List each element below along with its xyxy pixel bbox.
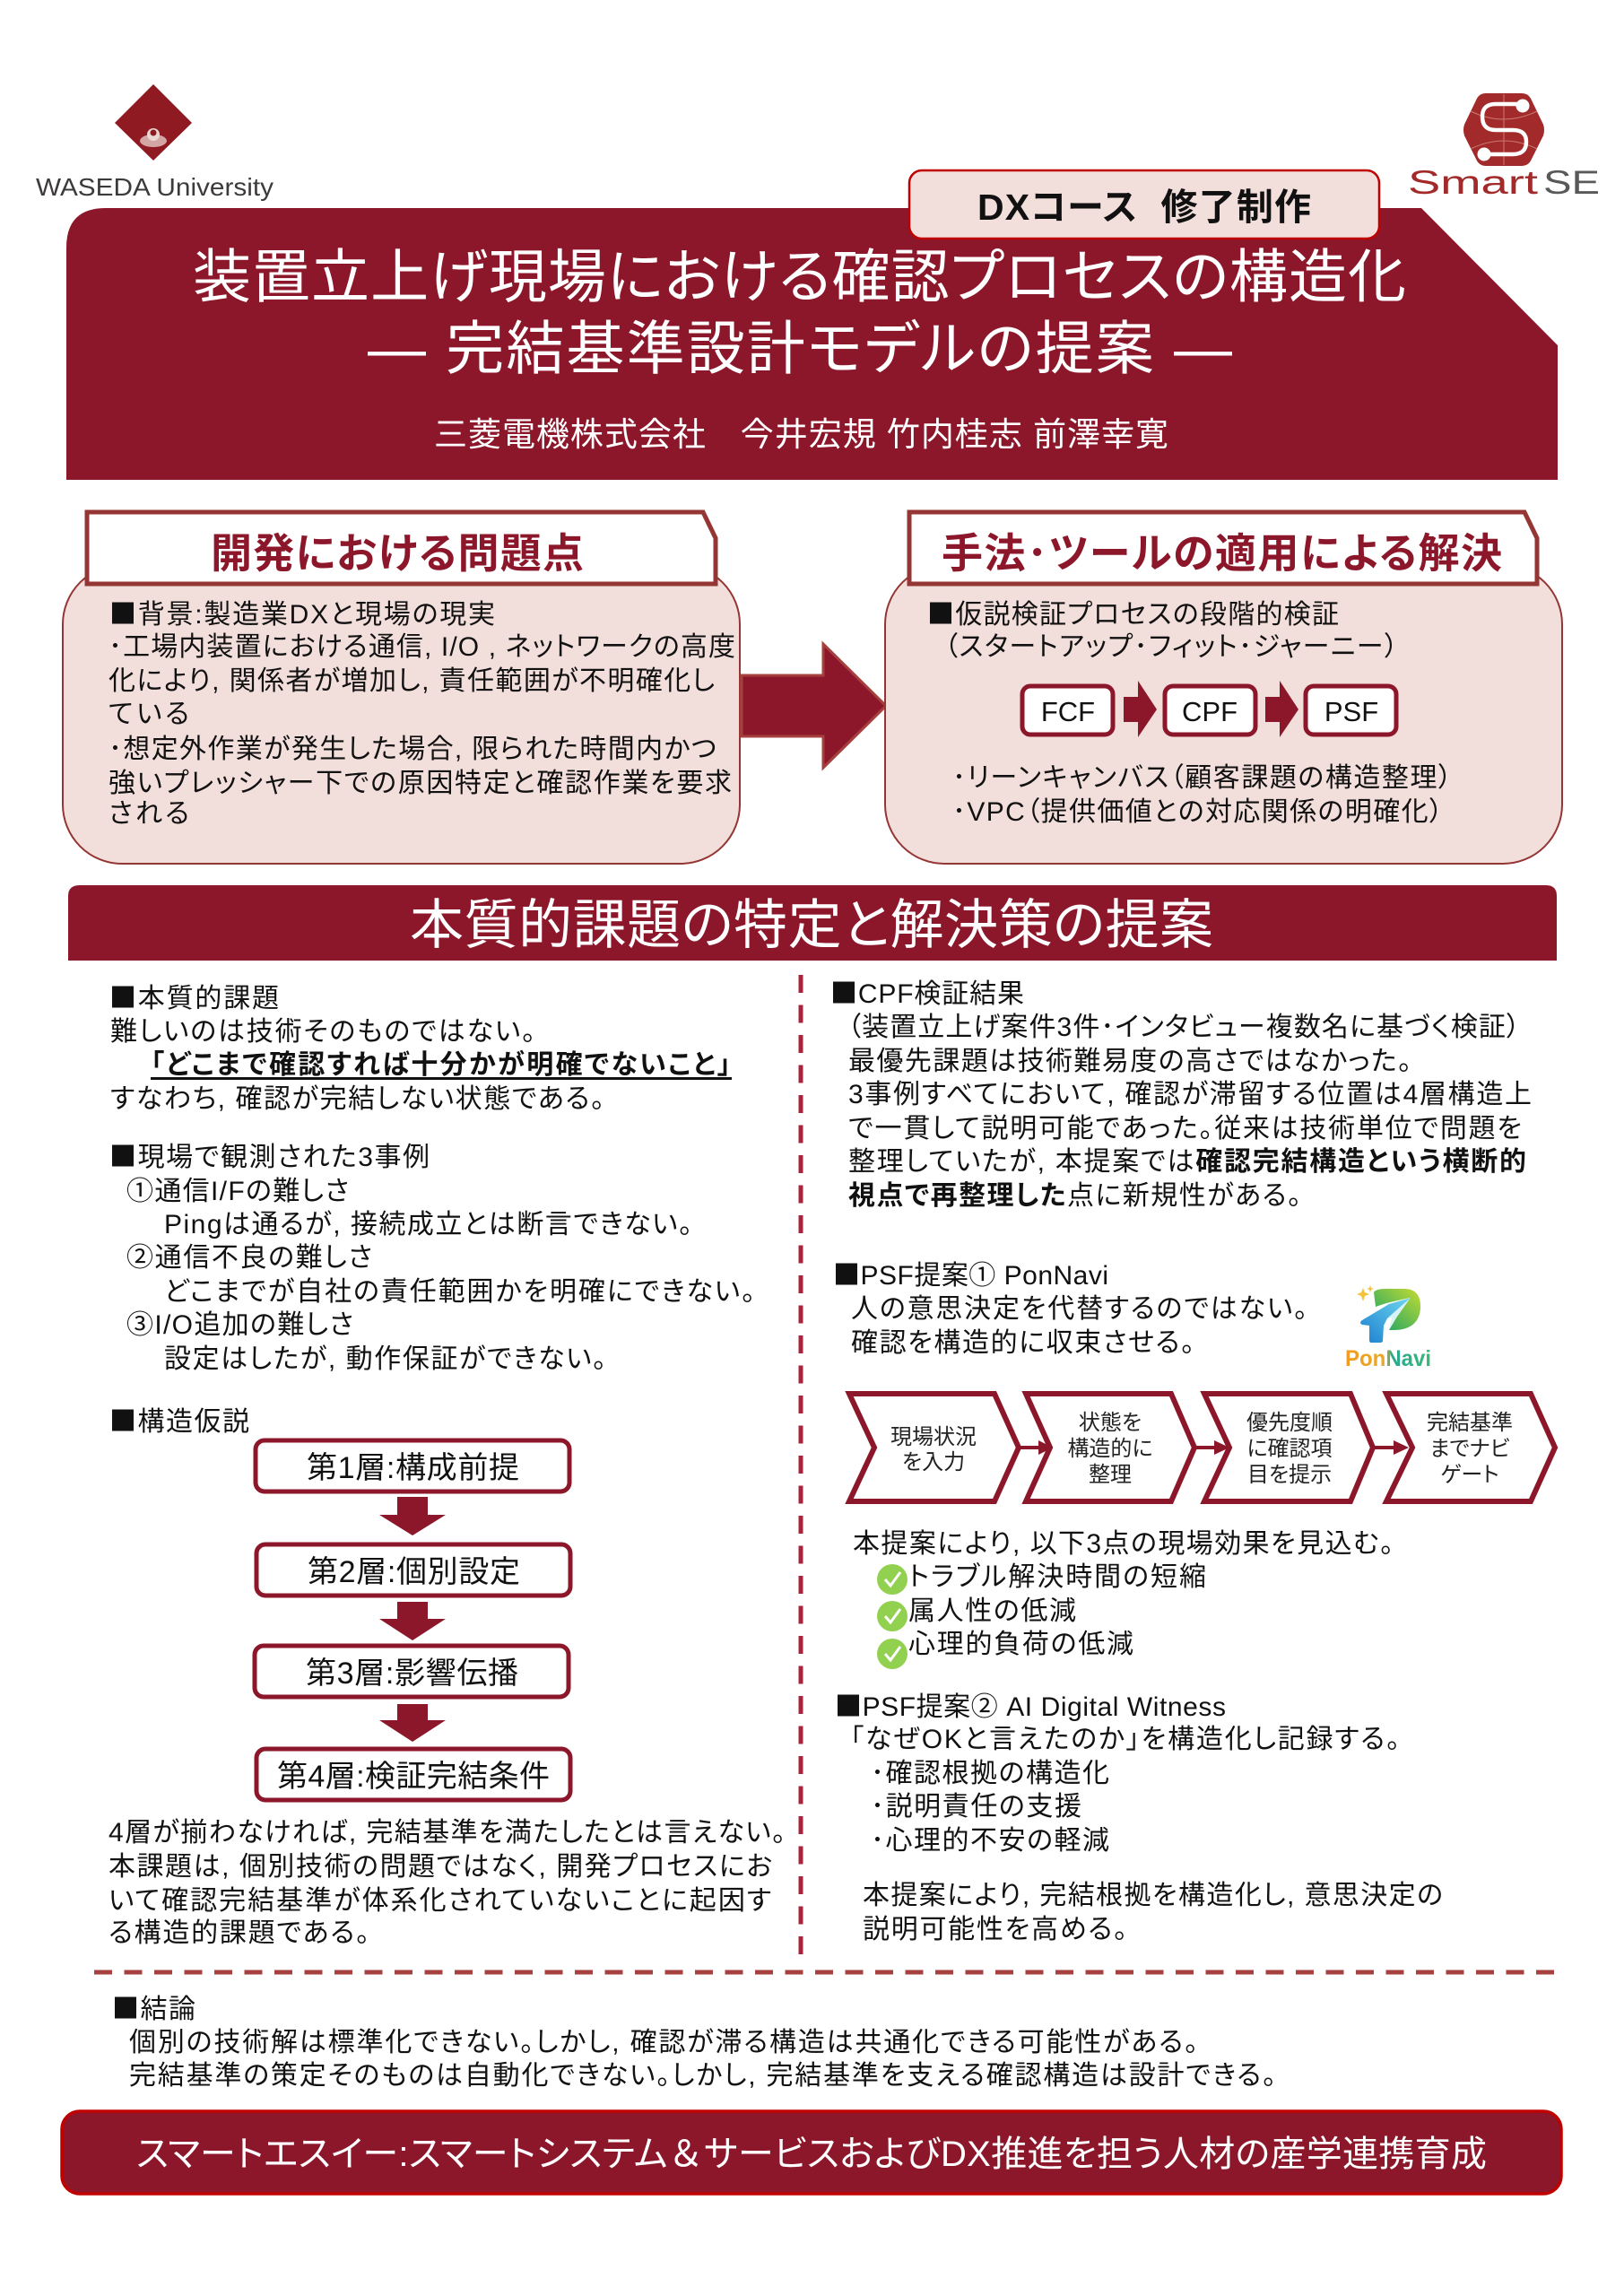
left column: three cases: ②通信不良の難しさ bbox=[126, 1243, 372, 1273]
tag: DX course bbox=[909, 170, 1379, 239]
check item 3 bbox=[877, 1630, 1133, 1669]
chevron 3: に確認項 bbox=[1246, 1437, 1333, 1461]
footer band bbox=[62, 2111, 1561, 2194]
layer 2 bbox=[256, 1544, 570, 1596]
right column: CPF results: ■CPF検証結果 bbox=[830, 971, 1024, 1011]
section heading band: 本質的課題の特定と解決策の提案 bbox=[410, 895, 1213, 955]
arrow down 3 bbox=[379, 1704, 446, 1742]
panel tab: problems heading bbox=[87, 512, 716, 584]
right column: PSF proposal 1: 確認を構造的に収束させる。 bbox=[851, 1328, 1194, 1358]
FCF CPF PSF flow: CPF bbox=[1182, 696, 1238, 727]
left column: essential issue: すなわち, 確認が完結しない状態である。 bbox=[110, 1084, 604, 1114]
check item 1: トラブル解決時間の短縮 bbox=[908, 1562, 1206, 1592]
logo: Smart SE bbox=[1408, 94, 1600, 201]
chevron 2: 構造的に bbox=[1067, 1437, 1153, 1461]
conclusion: ■結論 bbox=[112, 1987, 195, 2026]
conclusion: 個別の技術解は標準化できない。しかし, 確認が滞る構造は共通化できる可能性がある。 bbox=[129, 2028, 1198, 2057]
check item 3: 心理的負荷の低減 bbox=[908, 1630, 1133, 1659]
tools list: ･リーンキャンバス（顧客課題の構造整理） bbox=[952, 763, 1452, 793]
panel tab: solutions heading: 手法･ツールの適用による解決 bbox=[942, 530, 1502, 577]
solutions text: ■仮説検証プロセスの段階的検証 bbox=[927, 592, 1339, 631]
logo: Smart SE: SE bbox=[1543, 164, 1600, 201]
check item 2: 属人性の低減 bbox=[908, 1596, 1076, 1626]
left column: essential issue bbox=[109, 976, 732, 1114]
chevron 1: を入力 bbox=[902, 1450, 965, 1474]
chevron process flow bbox=[849, 1394, 1555, 1501]
footer band: スマートエスイー:スマートシステム＆サービスおよびDX推進を担う人材の産学連携育成 bbox=[136, 2125, 1487, 2177]
solutions text bbox=[927, 592, 1398, 662]
chevron 3 bbox=[1204, 1394, 1373, 1501]
chevron 2: 整理 bbox=[1089, 1463, 1132, 1487]
section heading band bbox=[68, 885, 1557, 961]
left column: three cases: Pingは通るが, 接続成立とは断言できない。 bbox=[164, 1210, 692, 1239]
chevron 4: 完結基準 bbox=[1427, 1411, 1513, 1435]
right column: CPF results: 最優先課題は技術難易度の高さではなかった。 bbox=[848, 1047, 1411, 1076]
left column: essential issue: ■本質的課題 bbox=[109, 976, 279, 1015]
right column: CPF results: 視点で再整理した点に新規性がある。 bbox=[848, 1181, 1301, 1211]
problems text: ている bbox=[109, 700, 189, 729]
left column: hypothesis conclusion: 本課題は, 個別技術の問題ではなく, 開発プロセスにお bbox=[109, 1852, 772, 1882]
right column: CPF results: 3事例すべてにおいて, 確認が滞留する位置は4層構造上 bbox=[848, 1080, 1532, 1109]
tag: DX course: DXコース 修了制作 bbox=[977, 187, 1311, 228]
left column: essential issue: 難しいのは技術そのものではない。 bbox=[110, 1017, 535, 1047]
right column: PSF proposal 1: ■PSF提案① PonNavi bbox=[833, 1253, 1108, 1292]
right column: CPF results: 整理していたが, 本提案では確認完結構造という横断的 bbox=[848, 1147, 1526, 1177]
title line 1: 装置立上げ現場における確認プロセスの構造化 bbox=[193, 244, 1406, 309]
left column: three cases: 設定はしたが, 動作保証ができない。 bbox=[164, 1344, 606, 1374]
conclusion bbox=[112, 1987, 1276, 2091]
right column: CPF results bbox=[830, 971, 1532, 1211]
left column: three cases: どこまでが自社の責任範囲かを明確にできない。 bbox=[164, 1277, 755, 1307]
chevron 4: ゲート bbox=[1440, 1463, 1499, 1487]
tools list bbox=[952, 763, 1452, 827]
right column: PSF proposal 2: 説明可能性を高める。 bbox=[863, 1915, 1127, 1944]
right column: PSF proposal 2 bbox=[835, 1684, 1443, 1944]
left column: three cases: ■現場で観測された3事例 bbox=[109, 1135, 430, 1174]
chevron 4: までナビ bbox=[1429, 1437, 1510, 1461]
chevron 1: 現場状況 bbox=[890, 1425, 977, 1449]
chevron 1 bbox=[849, 1394, 1019, 1501]
FCF CPF PSF flow bbox=[1022, 681, 1396, 737]
tools list: ･VPC（提供価値との対応関係の明確化） bbox=[952, 797, 1443, 827]
logo: PonNavi: PonNavi bbox=[1345, 1346, 1431, 1371]
right column: PSF proposal 1 bbox=[833, 1253, 1307, 1358]
layer stack diagram bbox=[255, 1440, 570, 1800]
layer 4 bbox=[256, 1749, 570, 1800]
title line 2: — 完結基準設計モデルの提案 — bbox=[368, 316, 1232, 381]
left column: hypothesis conclusion bbox=[109, 1818, 786, 1948]
layer 3: 第3層:影響伝播 bbox=[306, 1657, 518, 1691]
left column: hypothesis conclusion: 4層が揃わなければ, 完結基準を満たしたとは言えない。 bbox=[109, 1818, 786, 1848]
solutions text: （スタートアップ･フィット･ジャーニー） bbox=[944, 632, 1398, 662]
right column: PSF proposal 2: ■PSF提案② AI Digital Witness bbox=[835, 1684, 1226, 1724]
logo: Waseda University bbox=[36, 84, 274, 201]
chevron 2 bbox=[1026, 1394, 1194, 1501]
right column: PSF proposal 2: 「なぜOKと言えたのか」を構造化し記録する。 bbox=[850, 1725, 1400, 1754]
right column: PSF proposal 2: 本提案により, 完結根拠を構造化し, 意思決定の bbox=[863, 1881, 1443, 1910]
panel tab: problems heading: 開発における問題点 bbox=[211, 530, 584, 577]
panel: development problems bbox=[63, 512, 740, 864]
logo: PonNavi bbox=[1345, 1285, 1431, 1371]
layer 1: 第1層:構成前提 bbox=[307, 1451, 519, 1485]
problems text: 強いプレッシャー下での原因特定と確認作業を要求 bbox=[109, 769, 732, 798]
authors: 三菱電機株式会社 今井宏規 竹内桂志 前澤幸寛 bbox=[434, 416, 1168, 453]
logo: Waseda University: WASEDA University bbox=[36, 173, 274, 201]
right column: PSF proposal 2: ･説明責任の支援 bbox=[871, 1792, 1081, 1822]
layer 3 bbox=[255, 1646, 569, 1697]
connector arrows bbox=[1020, 1440, 1409, 1455]
layer 1 bbox=[256, 1440, 569, 1492]
problems text: 化により, 関係者が増加し, 責任範囲が不明確化し bbox=[109, 666, 715, 696]
problems text: ･想定外作業が発生した場合, 限られた時間内かつ bbox=[109, 735, 716, 764]
left column: hypothesis conclusion: いて確認完結基準が体系化されていないことに起因す bbox=[109, 1886, 771, 1916]
layer 4: 第4層:検証完結条件 bbox=[277, 1760, 550, 1794]
left column: structure hypothesis heading: ■構造仮説 bbox=[109, 1399, 249, 1439]
left column: hypothesis conclusion: る構造的課題である。 bbox=[109, 1918, 369, 1948]
problems text: ･工場内装置における通信, I/O , ネットワークの高度 bbox=[109, 632, 735, 662]
right column: PSF proposal 1: 人の意思決定を代替するのではない。 bbox=[851, 1294, 1307, 1324]
arrow down 2 bbox=[379, 1602, 446, 1640]
FCF CPF PSF flow: PSF bbox=[1324, 696, 1378, 727]
problems text bbox=[109, 592, 735, 829]
left column: three cases: ③I/O追加の難しさ bbox=[126, 1310, 353, 1340]
right column: PSF proposal 2: ･心理的不安の軽減 bbox=[871, 1826, 1109, 1856]
arrow: problems to solutions bbox=[742, 644, 886, 768]
chevron 4 bbox=[1386, 1394, 1555, 1501]
arrow down 1 bbox=[379, 1497, 446, 1535]
panel tab: solutions heading bbox=[909, 512, 1537, 584]
panel: title banner bbox=[66, 208, 1558, 480]
left column: three cases: ①通信I/Fの難しさ bbox=[126, 1177, 349, 1206]
chevron 2: 状態を bbox=[1079, 1411, 1142, 1435]
field effects list bbox=[853, 1529, 1394, 1669]
conclusion: 完結基準の策定そのものは自動化できない。しかし, 完結基準を支える確認構造は設計できる。 bbox=[129, 2061, 1276, 2091]
field effects list: 本提案により, 以下3点の現場効果を見込む。 bbox=[853, 1529, 1394, 1559]
left column: three cases bbox=[109, 1135, 755, 1374]
logo: Smart SE: Smart bbox=[1408, 164, 1539, 201]
right column: CPF results: で一貫して説明可能であった。従来は技術単位で問題を bbox=[848, 1114, 1522, 1144]
right column: PSF proposal 2: ･確認根拠の構造化 bbox=[871, 1759, 1109, 1788]
right column: CPF results: （装置立上げ案件3件･インタビュー複数名に基づく検証） bbox=[847, 1013, 1520, 1042]
panel: solutions bbox=[885, 512, 1562, 864]
FCF CPF PSF flow: FCF bbox=[1041, 696, 1095, 727]
layer 2: 第2層:個別設定 bbox=[308, 1555, 520, 1589]
chevron 3: 目を提示 bbox=[1247, 1463, 1332, 1487]
chevron 3: 優先度順 bbox=[1246, 1411, 1333, 1435]
problems text: される bbox=[109, 799, 189, 829]
left column: essential issue: 「どこまで確認すれば十分かが明確でないこと」 bbox=[151, 1049, 731, 1080]
problems text: ■背景:製造業DXと現場の現実 bbox=[109, 592, 495, 631]
